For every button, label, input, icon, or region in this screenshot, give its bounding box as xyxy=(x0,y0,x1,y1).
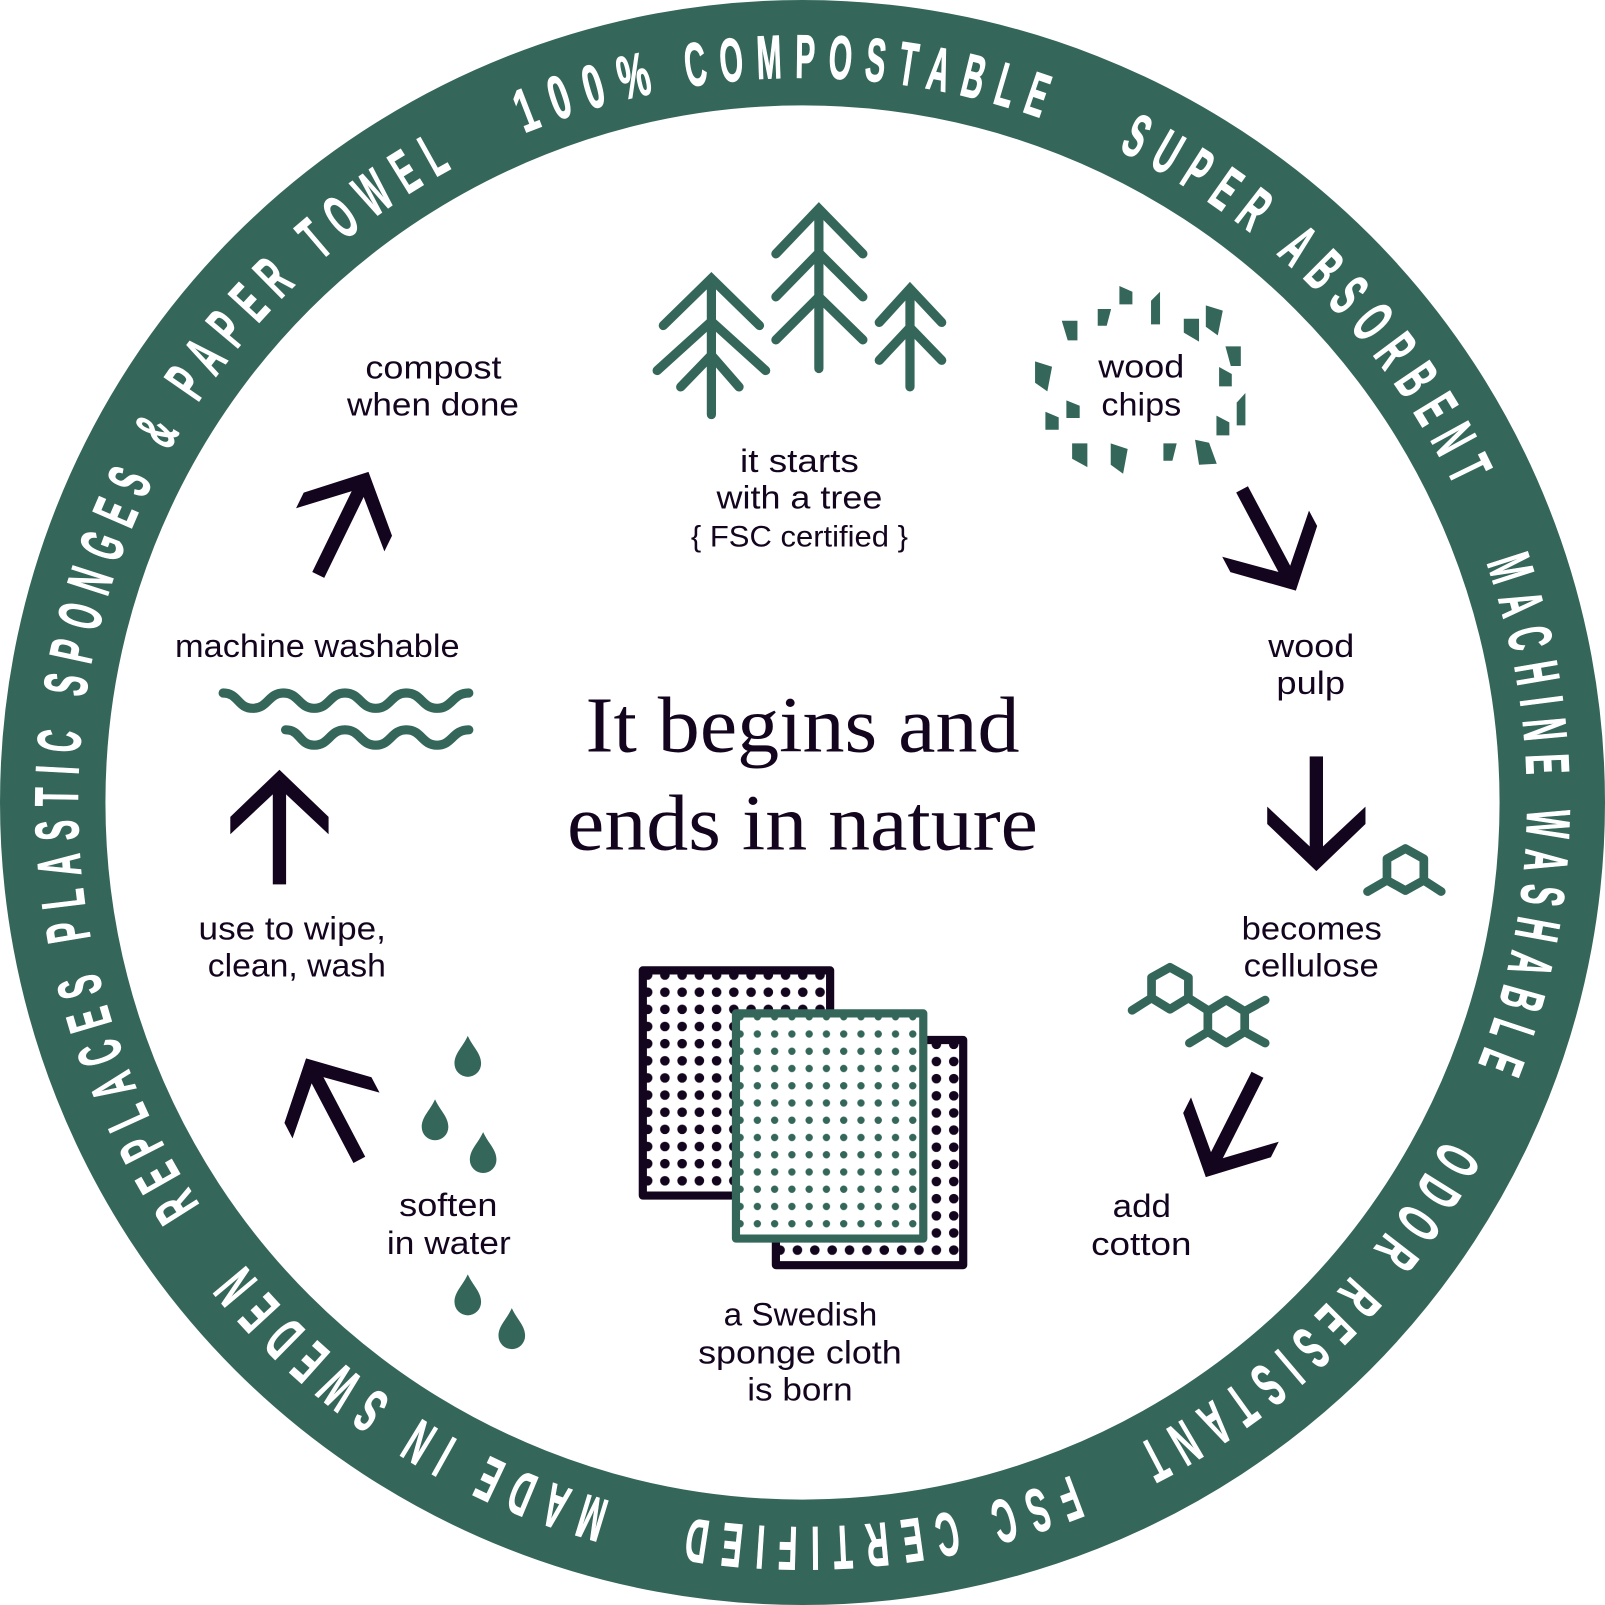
text: a Swedish sponge cloth is born xyxy=(698,1296,902,1407)
icon: trees xyxy=(657,209,942,415)
icon: single molecule xyxy=(1368,849,1441,892)
text: a Swedish sponge cloth is born: is born xyxy=(747,1370,853,1407)
text: compost when done xyxy=(346,349,519,423)
icon: sponge cloths xyxy=(643,966,963,1265)
arrow: soften to use xyxy=(263,1036,403,1183)
icon: wood chips xyxy=(1035,286,1245,474)
arrow: use to wash xyxy=(230,770,329,884)
arrow: pulp to cellulose xyxy=(1267,756,1365,871)
text: becomes cellulose xyxy=(1242,910,1382,984)
title: It begins and xyxy=(585,681,1020,769)
text: wood chips xyxy=(1097,348,1184,423)
text: add cotton: add xyxy=(1113,1187,1171,1224)
text: use to wipe, clean, wash: clean, wash xyxy=(208,947,386,984)
text: soften in water xyxy=(387,1186,511,1261)
back sponge right xyxy=(776,1036,963,1265)
ring text: benefits: FSC CERTIFIED xyxy=(686,1476,1085,1570)
ring text: benefits: REPLACES PLASTIC SPONGES & PAPER TOWEL xyxy=(34,136,452,1227)
text: becomes cellulose: cellulose xyxy=(1244,947,1379,984)
text: machine washable: machine washable xyxy=(175,627,460,664)
title: ends in nature xyxy=(567,780,1038,868)
text: soften in water: in water xyxy=(387,1224,511,1261)
title xyxy=(567,681,1038,868)
icon: water waves xyxy=(223,693,469,745)
text: wood pulp: pulp xyxy=(1276,664,1345,701)
text: use to wipe, clean, wash xyxy=(199,910,386,984)
text: wood chips: chips xyxy=(1101,386,1181,423)
text: it starts with a tree: { FSC certified } xyxy=(691,521,908,554)
text: a Swedish sponge cloth is born: a Swedish xyxy=(724,1296,877,1333)
text: add cotton xyxy=(1091,1187,1191,1262)
text: it starts with a tree: with a tree xyxy=(715,479,882,516)
text: compost when done: when done xyxy=(346,386,519,423)
ring text: benefits: ODOR RESISTANT xyxy=(1142,1145,1478,1484)
front green sponge xyxy=(736,1008,923,1239)
ring text: benefits: MADE IN SWEDEN xyxy=(212,1266,609,1542)
text: wood pulp: wood xyxy=(1267,627,1354,664)
text: it starts with a tree: it starts xyxy=(740,442,859,479)
text: becomes cellulose: becomes xyxy=(1242,910,1382,947)
text: wood chips: wood xyxy=(1097,348,1184,385)
icon: double molecule xyxy=(1132,967,1265,1043)
ring text: benefits: SUPER ABSORBENT xyxy=(1122,115,1493,480)
text: compost when done: compost xyxy=(365,349,502,386)
text: use to wipe, clean, wash: use to wipe, xyxy=(199,910,386,947)
back sponge left xyxy=(643,966,830,1196)
arrow: wash to compost xyxy=(274,450,413,596)
text: it starts with a tree xyxy=(691,442,908,554)
ring text: benefits: 100% xyxy=(513,52,652,133)
text: add cotton: cotton xyxy=(1091,1225,1191,1262)
icon: water drops xyxy=(422,1036,525,1349)
arrow: cellulose to cotton xyxy=(1162,1053,1301,1199)
ring text: benefits: COMPOSTABLE xyxy=(684,34,1053,118)
text: wood pulp xyxy=(1267,627,1354,701)
arrow: chips to pulp xyxy=(1199,466,1339,614)
text: a Swedish sponge cloth is born: sponge cloth xyxy=(698,1333,902,1370)
text: soften in water: soften xyxy=(399,1186,497,1223)
ring text: benefits: MACHINE WASHABLE xyxy=(1478,551,1570,1078)
